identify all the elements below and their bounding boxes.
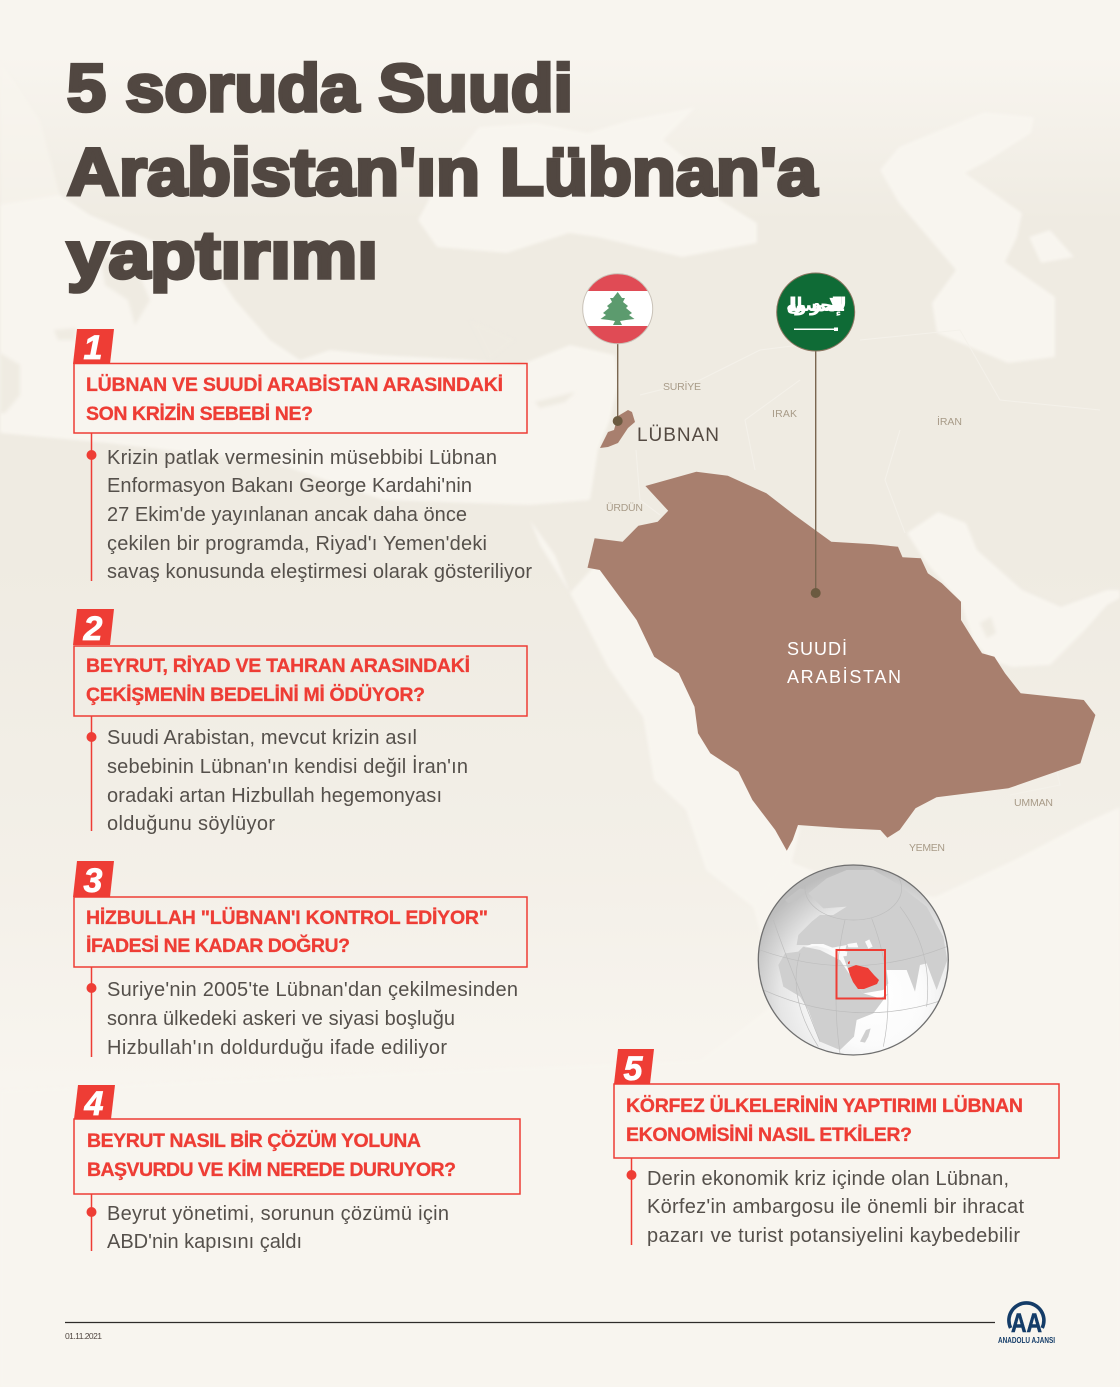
panel: question 1: Krizin patlak vermesinin müsebbibi Lübnan [107,447,497,469]
panel: question 1: LÜBNAN VE SUUDİ ARABİSTAN ARASINDAKİ [86,373,503,396]
panel: question 1: Enformasyon Bakanı George Kardahi'nin [107,475,472,497]
panel: question 4: ABD'nin kapısını çaldı [107,1231,302,1253]
panel: question 2 [73,609,527,835]
panel: question 1: çekilen bir programda, Riyad'ı Yemen'deki [107,533,487,555]
panel: question 2: ÇEKİŞMENİN BEDELİNİ Mİ ÖDÜYOR? [86,683,425,706]
panel: question 5: KÖRFEZ ÜLKELERİNİN YAPTIRIMI LÜBNAN [626,1094,1023,1117]
panel: question 1: savaş konusunda eleştirmesi olarak gösteriliyor [107,561,532,583]
panel: question 2: Suudi Arabistan, mevcut krizin asıl [107,727,417,749]
panel: question 5: pazarı ve turist potansiyelini kaybedebilir [647,1225,1020,1247]
panel: question 2: sebebinin Lübnan'ın kendisi değil İran'ın [107,755,468,778]
pin: Lebanon [613,343,623,426]
panel: question 3: Hizbullah'ın doldurduğu ifade ediliyor [107,1037,447,1059]
panel: question 1: 1 [84,329,102,367]
panel: question 3: 3 [84,862,103,900]
panel: question 2: olduğunu söylüyor [107,813,275,835]
map: Lebanon [600,410,635,448]
map labels: IRAK [772,408,797,420]
logo: Anadolu Ajansi: AA [1011,1308,1042,1338]
logo: Anadolu Ajansi [998,1303,1055,1345]
panel: question 4: Beyrut yönetimi, sorunun çözümü için [107,1203,449,1225]
panel: question 5: EKONOMİSİNİ NASIL ETKİLER? [626,1123,912,1146]
flag: Lebanon [580,270,656,347]
logo: Anadolu Ajansi: ANADOLU AJANSI [998,1335,1055,1345]
panel: question 2: BEYRUT, RİYAD VE TAHRAN ARASINDAKİ [86,654,470,677]
panel: question 2: oradaki artan Hizbullah hegemonyası [107,785,442,807]
panel: question 3: sonra ülkedeki askeri ve siyasi boşluğu [107,1008,455,1030]
panel: question 4 [74,1085,520,1253]
map labels: SURİYE [663,380,701,393]
panel: question 1: 27 Ekim'de yayınlanan ancak daha önce [107,504,467,526]
panel: question 5 [614,1049,1059,1247]
title: Arabistan'ın Lübnan'a [67,135,818,210]
panel: question 3: Suriye'nin 2005'te Lübnan'dan çekilmesinden [107,979,518,1001]
panel: question 4: BEYRUT NASIL BİR ÇÖZÜM YOLUNA [87,1129,421,1152]
title: yaptırımı [67,218,378,293]
map labels: YEMEN [909,842,945,854]
panel: question 4: 4 [84,1085,104,1123]
panel: question 5: Derin ekonomik kriz içinde olan Lübnan, [647,1168,1009,1190]
map labels: ARABİSTAN [787,667,901,687]
flag: Saudi Arabia: لا إله إلا الله محمد رسول الله [786,294,847,316]
panel: question 1: SON KRİZİN SEBEBİ NE? [86,402,313,425]
map: Saudi Arabia [588,472,1095,851]
panel: question 3: İFADESİ NE KADAR DOĞRU? [86,934,350,957]
panel: question 1 [73,329,532,583]
map labels: UMMAN [1014,797,1053,809]
panel: question 5: Körfez'in ambargosu ile önemli bir ihracat [647,1196,1024,1218]
title [67,51,818,293]
map labels: İRAN [937,415,962,428]
panel: question 2: 2 [83,610,103,648]
map labels: LÜBNAN [637,425,719,446]
panel: question 3 [73,861,527,1059]
map labels: ÜRDÜN [606,502,643,514]
map labels [606,380,1053,854]
panel: question 3: HİZBULLAH "LÜBNAN'I KONTROL EDİYOR" [86,906,488,929]
flag: Saudi Arabia [777,273,855,351]
locator globe [758,857,948,1055]
map labels: SUUDİ [787,639,847,659]
panel: question 5: 5 [624,1050,644,1088]
panel: question 4: BAŞVURDU VE KİM NEREDE DURUYOR? [87,1158,456,1181]
title: 5 soruda Suudi [67,51,573,126]
pin: Saudi Arabia [811,350,821,598]
date: 01.11.2021 [65,1331,102,1341]
